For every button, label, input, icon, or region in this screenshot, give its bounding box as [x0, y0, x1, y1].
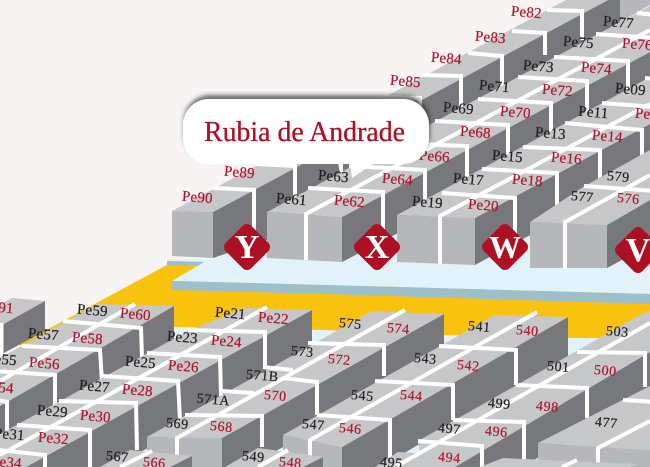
- labels: ridge Y: Pe90: [181, 189, 213, 207]
- labels: left ridges: Pe60: [119, 306, 151, 324]
- ridge W: Pe19 to Pe09: [397, 77, 650, 265]
- labels: ridge W: Pe20: [467, 197, 499, 215]
- labels: centre and right ridges: 540: [515, 323, 539, 340]
- ridge Pe91: [0, 298, 45, 357]
- labels: ridge Y: Pe83: [474, 29, 506, 47]
- labels: centre and right ridges: 541: [467, 319, 491, 336]
- labels: centre and right ridges: 549: [241, 449, 265, 466]
- labels: ridge V: [570, 169, 640, 208]
- labels: ridge X: Pe68: [459, 124, 491, 142]
- labels: left ridges: Pe21: [214, 305, 246, 323]
- labels: ridge W: Pe18: [511, 172, 543, 190]
- callout bubble: Rubia de Andrade: [183, 99, 429, 178]
- ridge G: 477: [538, 386, 650, 467]
- labels: ridge X: Pe61: [275, 191, 307, 209]
- labels: ridge W: Pe16: [550, 150, 583, 168]
- labels: ridge W: Pe14: [591, 128, 624, 146]
- labels: centre and right ridges: 498: [535, 399, 559, 416]
- labels: ridge X: [275, 14, 650, 211]
- far block at top right: [620, 0, 650, 22]
- labels: centre and right ridges: 575: [338, 316, 362, 333]
- labels: left ridges: Pe28: [121, 382, 153, 400]
- ridge D: 575 to 568: [147, 310, 444, 467]
- labels: centre and right ridges: 545: [350, 388, 374, 405]
- labels: centre and right ridges: 569: [165, 416, 189, 433]
- row badge W: W: [489, 229, 521, 265]
- labels: centre and right ridges: 571A: [196, 392, 231, 409]
- labels: centre and right ridges: 568: [209, 419, 233, 436]
- ridge V: 577 to 579: [530, 150, 650, 268]
- labels: left ridges: [0, 299, 289, 467]
- labels: left ridges: Pe23: [166, 329, 198, 347]
- labels: left ridges: Pe29: [36, 403, 68, 421]
- labels: ridge Y: [181, 4, 542, 207]
- row badge Y: Y: [235, 229, 259, 266]
- labels: centre and right ridges: 543: [413, 351, 437, 368]
- labels: left ridges: Pe26: [167, 358, 200, 376]
- labels: left ridges: Pe56: [28, 355, 61, 373]
- labels: ridge X: Pe66: [418, 148, 451, 166]
- labels: centre and right ridges: 500: [593, 363, 617, 380]
- labels: centre and right ridges: 571B: [245, 368, 279, 385]
- labels: ridge W: Pe15: [491, 148, 523, 166]
- ridge B: Pe21 to Pe34: [0, 307, 312, 467]
- labels: centre and right ridges: 477: [594, 415, 618, 432]
- ridge F: 503 to 494: [375, 310, 650, 467]
- labels: ridge X: Pe70: [499, 104, 531, 122]
- labels: left ridges: Pe22: [257, 310, 289, 328]
- callout name: Rubia de Andrade: [204, 117, 405, 148]
- labels: centre and right ridges: 503: [605, 324, 629, 341]
- labels: ridge X: Pe77: [602, 14, 635, 32]
- labels: ridge X: Pe63: [317, 168, 349, 186]
- labels: centre and right ridges: 494: [437, 450, 461, 467]
- floor: yellow aisle and light blue ground: [0, 259, 650, 467]
- labels: ridge X: Pe74: [580, 60, 613, 78]
- labels: left ridges: Pe27: [78, 378, 111, 396]
- labels: ridge Y: Pe82: [510, 4, 542, 22]
- labels: centre and right ridges: 501: [546, 359, 570, 376]
- labels: ridge X: Pe75: [562, 34, 594, 52]
- labels: ridge W: Pe11: [578, 104, 609, 122]
- ridge E: 541 to 546: [283, 312, 568, 467]
- labels: ridge W: Pe13: [534, 125, 566, 143]
- labels: ridge W: Pe09: [614, 81, 646, 99]
- labels: ridge V: 576: [616, 191, 640, 208]
- row badge V: V: [626, 232, 650, 269]
- labels: ridge V: 579: [606, 169, 630, 186]
- labels: ridge V: 577: [570, 189, 594, 206]
- labels: centre and right ridges: 573: [290, 344, 314, 361]
- labels: centre and right ridges: [105, 316, 629, 467]
- labels: ridge X: Pe71: [478, 78, 510, 96]
- labels: ridge X: Pe73: [522, 58, 554, 76]
- labels: ridge X: Pe64: [381, 171, 414, 189]
- labels: centre and right ridges: 574: [386, 321, 410, 338]
- labels: left ridges: Pe58: [71, 330, 103, 348]
- labels: ridge W: Pe17: [452, 171, 485, 189]
- labels: ridge Y: Pe85: [389, 73, 421, 91]
- stage platform: [172, 150, 650, 304]
- labels: ridge W: [411, 81, 650, 215]
- labels: centre and right ridges: 544: [399, 388, 423, 405]
- labels: centre and right ridges: 499: [487, 396, 511, 413]
- labels: ridge Y: Pe84: [430, 50, 463, 68]
- labels: ridge X: Pe69: [442, 100, 474, 118]
- front blocks at the bottom edge: [100, 448, 636, 467]
- ridge Y: Pe90 to Pe82: [172, 0, 620, 258]
- row badge X: X: [365, 229, 390, 266]
- ridge X: Pe61 to Pe77: [267, 6, 650, 262]
- ridge A: Pe59 to Pe54: [0, 304, 174, 448]
- labels: left ridges: Pe30: [79, 408, 111, 426]
- labels: left ridges: Pe24: [210, 333, 243, 351]
- labels: ridge Y: Pe89: [223, 164, 255, 182]
- labels: centre and right ridges: 547: [301, 417, 325, 434]
- labels: left ridges: Pe32: [37, 430, 69, 448]
- labels: ridge W: Pe19: [411, 194, 443, 212]
- labels: left ridges: Pe57: [27, 326, 60, 344]
- labels: centre and right ridges: 570: [263, 388, 287, 405]
- labels: centre and right ridges: 572: [327, 352, 351, 369]
- labels: centre and right ridges: 567: [105, 449, 129, 466]
- labels: centre and right ridges: 496: [484, 424, 508, 441]
- labels: left ridges: Pe25: [124, 354, 156, 372]
- labels: centre and right ridges: 497: [437, 421, 461, 438]
- labels: left ridges: Pe59: [76, 302, 108, 320]
- labels: ridge X: Pe62: [333, 193, 365, 211]
- labels: centre and right ridges: 542: [456, 358, 480, 375]
- labels: ridge X: Pe72: [541, 82, 573, 100]
- labels: centre and right ridges: 546: [338, 421, 362, 438]
